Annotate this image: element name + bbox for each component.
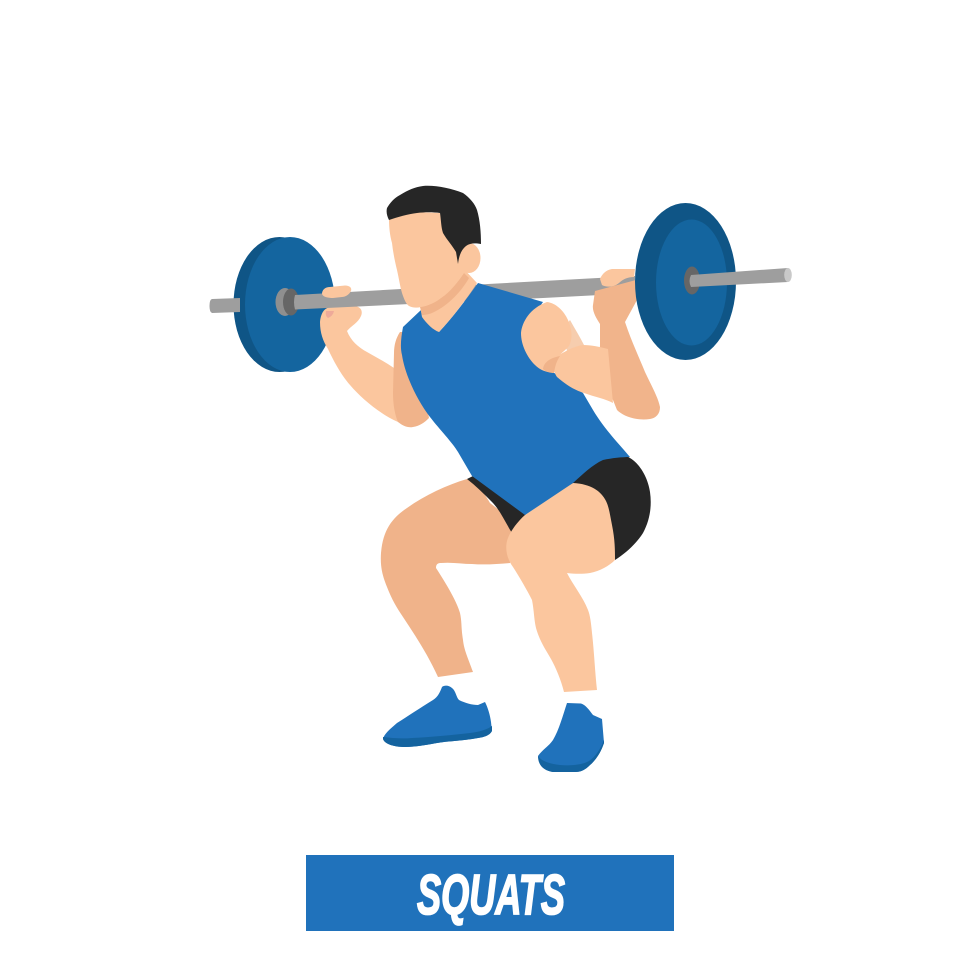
bar centre [294, 276, 635, 310]
left fingers [322, 286, 351, 298]
title text: SQUATS [417, 863, 565, 927]
ear [458, 243, 480, 273]
barbell weight plate: left [234, 237, 335, 372]
barbell weight plate: right [635, 203, 736, 360]
left thumb detail [326, 311, 334, 318]
back leg [381, 479, 525, 677]
bar end: left [210, 298, 240, 313]
face [389, 212, 464, 308]
shoe: right [538, 703, 604, 772]
right shoulder [521, 302, 572, 372]
shorts: back [467, 476, 526, 533]
hair [387, 186, 481, 264]
left upper arm [393, 332, 429, 427]
right fingers [600, 269, 635, 287]
neck [420, 268, 477, 332]
front leg [506, 483, 615, 692]
shoe: left [383, 686, 492, 747]
right bicep [553, 345, 613, 403]
tank top [401, 283, 630, 515]
shorts: front [555, 445, 651, 560]
left forearm and palm [320, 306, 398, 422]
bar end: right [690, 268, 792, 287]
right forearm and palm [593, 280, 660, 420]
shoulder highlight [562, 320, 584, 351]
title banner [306, 855, 674, 931]
elbow crease [543, 356, 560, 373]
neck shadow [420, 273, 469, 315]
